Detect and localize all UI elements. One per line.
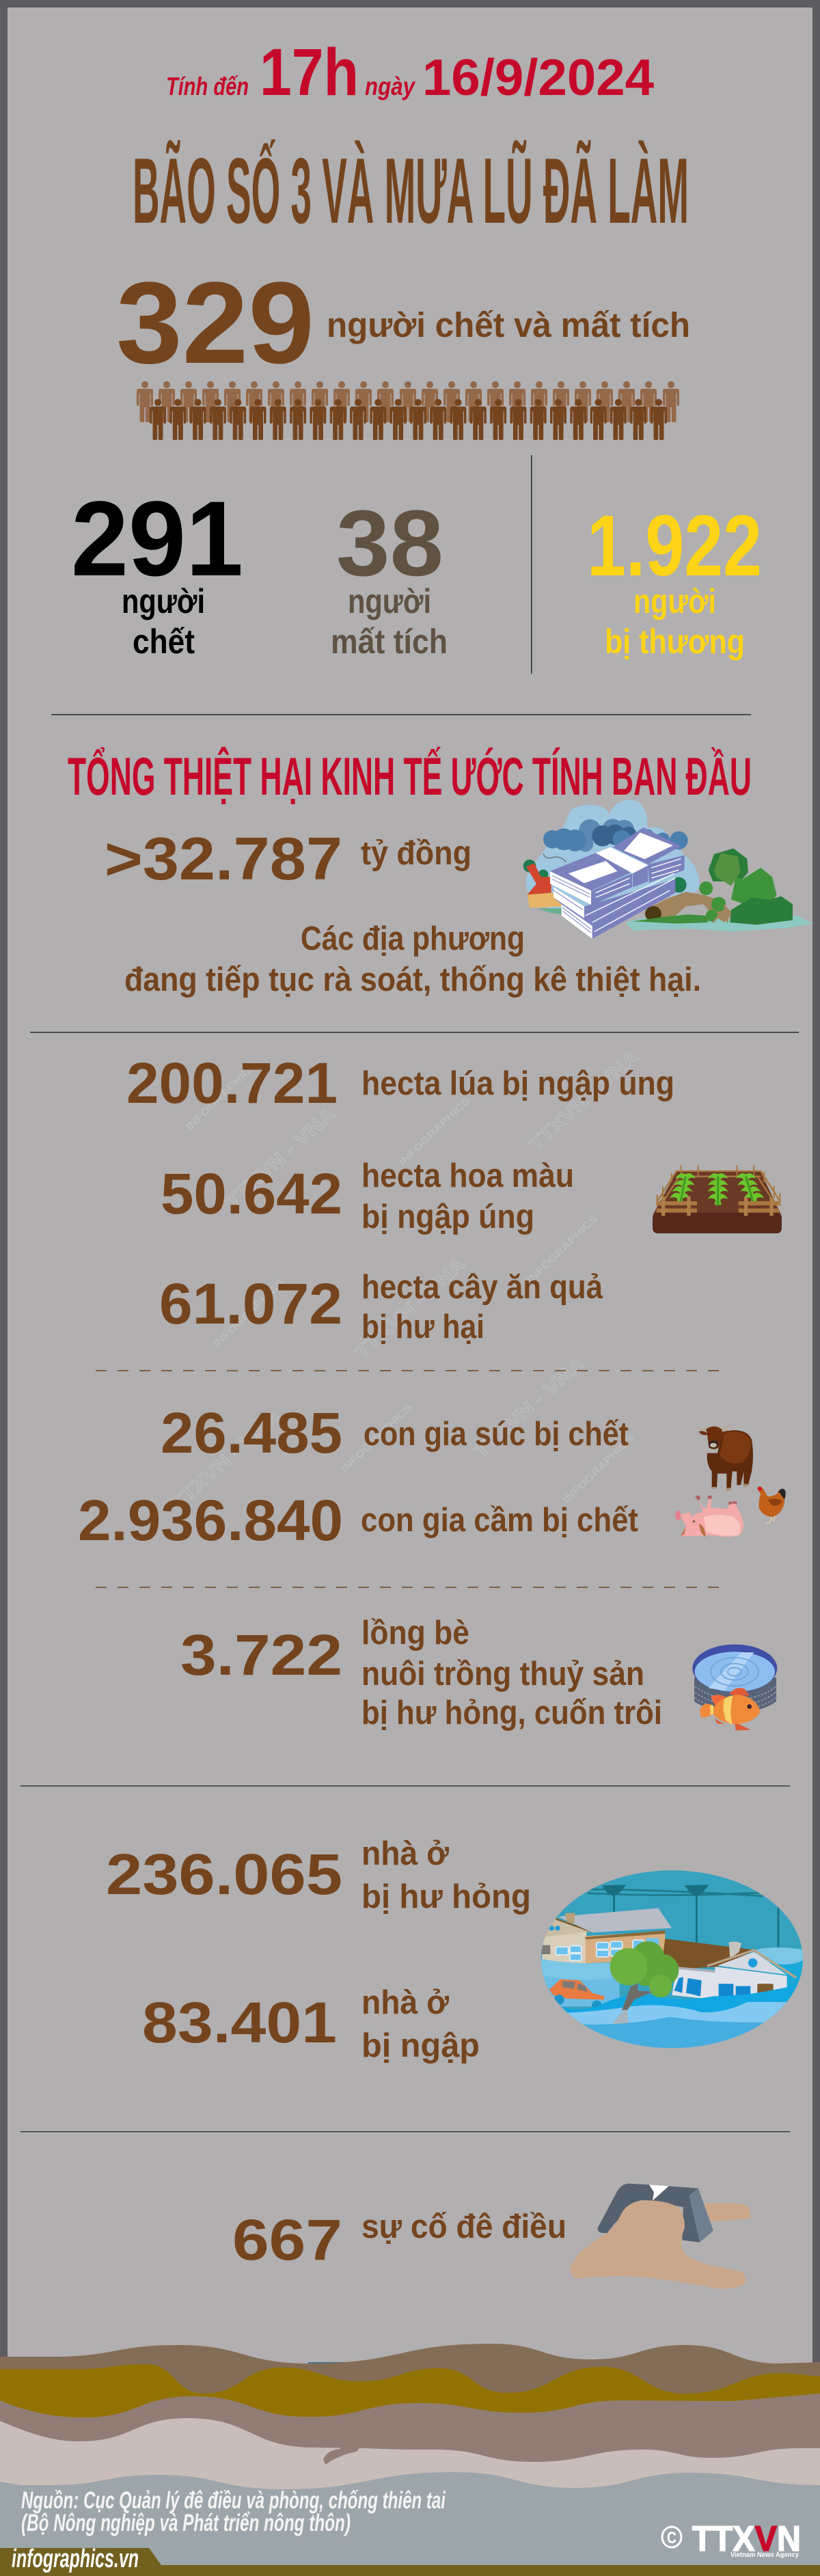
source note: (Bộ Nông nghiệp và Phát triển nông thôn): [21, 2510, 351, 2536]
clownfish: [700, 1688, 761, 1731]
housing damage: 236.065: [106, 1842, 342, 1906]
crop damage: bị ngập úng: [361, 1198, 534, 1235]
livestock and poultry: 26.485: [161, 1401, 342, 1465]
housing damage: bị hư hỏng: [361, 1878, 531, 1915]
economic loss value: >32.787: [105, 825, 342, 892]
chicken: [758, 1486, 786, 1523]
icon: money and storm damage: [523, 800, 813, 939]
crop damage: 61.072: [159, 1272, 342, 1336]
stat: injured: [587, 497, 762, 661]
dike incidents: 667: [232, 2208, 342, 2272]
aquaculture cages: nuôi trồng thuỷ sản: [361, 1656, 644, 1693]
total deaths and missing: [116, 258, 690, 388]
bundles of banknotes: [550, 827, 685, 939]
icon: fish tank: [692, 1645, 777, 1731]
logo: TTXVN: C: [667, 2529, 676, 2547]
pig: [675, 1495, 743, 1537]
aquaculture cages: 3.722: [180, 1623, 342, 1687]
source note: Nguồn: Cục Quản lý đê điều và phòng, chống thiên tai: [21, 2487, 446, 2514]
economic loss value: [105, 825, 472, 892]
source note: [21, 2487, 446, 2536]
housing damage: bị ngập: [361, 2027, 480, 2064]
stat: injured: người: [633, 582, 716, 620]
crop damage: 200.721: [126, 1051, 338, 1115]
aquaculture cages: [180, 1615, 662, 1731]
stat: missing: mất tích: [331, 622, 448, 661]
dike incidents: [232, 2208, 566, 2272]
aquaculture cages: bị hư hỏng, cuốn trôi: [361, 1695, 662, 1731]
footer bar with site name: infographics.vn: [12, 2545, 139, 2573]
watermarks: INFOGRAPHICS: [184, 1059, 259, 1133]
watermarks: INFOGRAPHICS: [525, 1212, 600, 1286]
crop damage: hecta lúa bị ngập úng: [361, 1065, 674, 1102]
date line: ngày: [365, 72, 416, 100]
livestock and poultry: con gia súc bị chết: [364, 1416, 629, 1453]
housing damage: 83.401: [142, 1990, 337, 2055]
watermarks: TTXVN - VNA: [470, 1353, 588, 1462]
livestock and poultry: con gia cầm bị chết: [361, 1502, 638, 1539]
dike incidents: sự cố đê điều: [361, 2208, 566, 2245]
date line: [166, 35, 654, 109]
crop damage: 50.642: [161, 1162, 342, 1226]
stat: injured: 1.922: [587, 497, 762, 594]
cow: [696, 1423, 753, 1490]
note text: [124, 920, 701, 998]
icon: broken dike: [570, 2184, 751, 2289]
watermarks: [167, 1046, 642, 1514]
decorative waves at bottom: [0, 2344, 820, 2576]
watermarks: TTXVN - VNA: [221, 1104, 339, 1212]
economic loss value: tỷ đồng: [361, 835, 472, 872]
watermarks: TTXVN - VNA: [525, 1046, 642, 1155]
date line: Tính đến: [166, 72, 249, 100]
stat: dead: người: [122, 582, 205, 620]
watermarks: INFOGRAPHICS: [397, 1095, 472, 1168]
crop damage: [126, 1051, 674, 1345]
stat: missing: 38: [336, 491, 443, 596]
date line: 17h: [260, 35, 359, 109]
icon: animals: [675, 1423, 786, 1537]
total deaths and missing: người chết và mất tích: [327, 305, 690, 344]
watermarks: INFOGRAPHICS: [561, 1432, 636, 1506]
people pictogram: [137, 381, 679, 440]
watermarks: TTXVN - VNA: [351, 1254, 469, 1362]
housing damage: nhà ở: [361, 1984, 449, 2021]
stat: missing: [331, 491, 448, 661]
note text: Các địa phương: [301, 920, 525, 957]
note text: đang tiếp tục rà soát, thống kê thiệt hại.: [124, 961, 701, 998]
logo: TTXVN: TTXVN: [692, 2519, 801, 2559]
crop damage: hecta cây ăn quả: [361, 1269, 603, 1306]
crop damage: hecta hoa màu: [361, 1157, 574, 1194]
watermarks: INFOGRAPHICS: [339, 1401, 414, 1475]
total deaths and missing: 329: [116, 258, 314, 388]
stat: dead: 291: [71, 480, 243, 599]
crop damage: bị hư hại: [361, 1308, 484, 1345]
footer bar with site name: [0, 2545, 820, 2576]
logo: TTXVN: Vietnam News Agency: [730, 2551, 799, 2559]
date line: 16/9/2024: [422, 49, 654, 106]
housing damage: nhà ở: [361, 1835, 449, 1872]
stat: injured: bị thương: [605, 622, 745, 661]
livestock and poultry: 2.936.840: [78, 1488, 343, 1552]
stat: missing: người: [348, 582, 431, 620]
watermarks: INFOGRAPHICS: [211, 1276, 286, 1350]
aquaculture cages: lồng bè: [361, 1615, 469, 1652]
stat: dead: [71, 480, 243, 661]
watermarks: TTXVN - VNA: [167, 1406, 284, 1514]
icon: flooded houses: [540, 1870, 804, 2050]
stat: dead: chết: [133, 622, 195, 661]
livestock and poultry: [78, 1401, 638, 1552]
icon: farm plot: [653, 1165, 782, 1233]
housing damage: [106, 1835, 531, 2064]
